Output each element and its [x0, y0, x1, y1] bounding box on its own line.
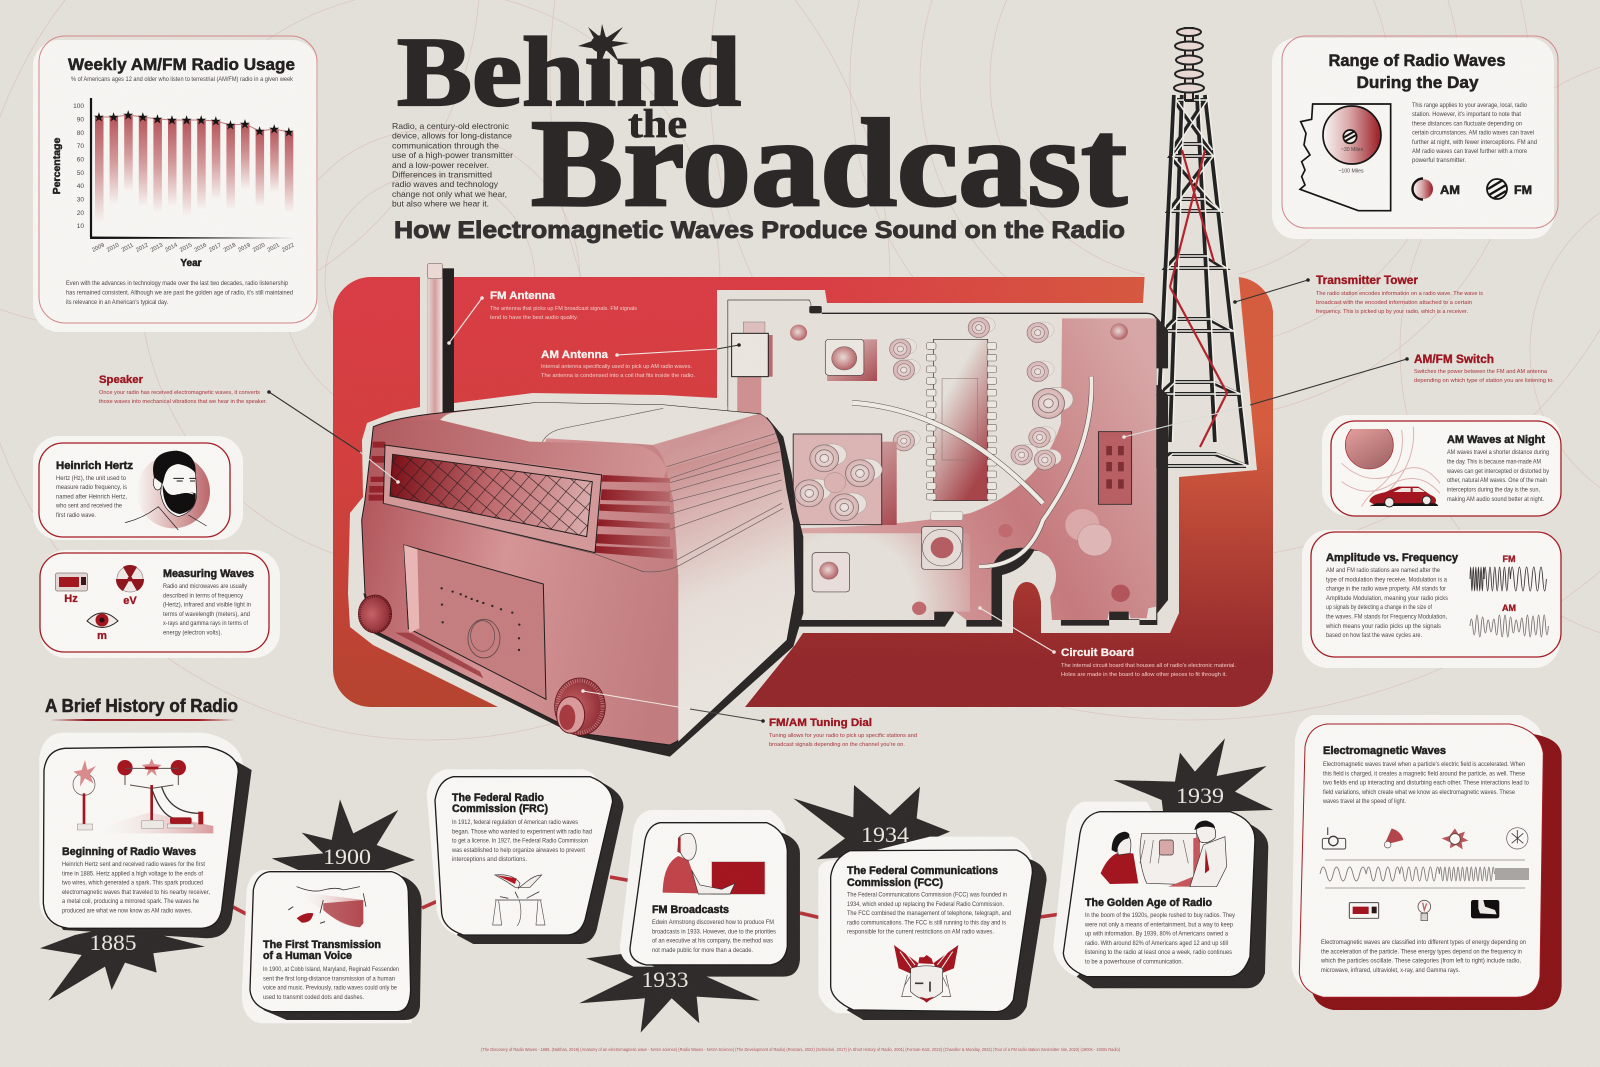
panel: electromagnetic waves: two fields end up interacting and disturbing each other. These interactions lead to	[1323, 781, 1530, 787]
bar chart	[51, 98, 295, 269]
timeline card: 1933: of an executive at his company, the method was	[652, 939, 773, 945]
tuning dial label	[581, 689, 917, 748]
timeline card: 1900: In 1900, at Cobb Island, Maryland, Reginald Fessenden	[263, 967, 399, 973]
title	[397, 18, 1127, 233]
timeline card: 1885: Heinrich Hertz sent and received radio waves for the first	[62, 862, 205, 868]
timeline card: 1934: 1934	[861, 822, 909, 847]
square components	[793, 339, 1132, 592]
panel: range of radio waves	[1272, 36, 1558, 239]
AM antenna label: The antenna is condensed into a coil that fits inside the radio.	[541, 373, 695, 379]
panel: measuring waves: terms of wavelength (meters), and	[163, 612, 250, 618]
panel: measuring waves: energy (electron volts).	[163, 630, 222, 636]
legend: AM and FM: AM	[1440, 183, 1460, 197]
bar chart: Percentage	[51, 138, 63, 194]
timeline card: 1900: voice and music. Previously, radio waves could only be	[263, 986, 398, 992]
title: Behind	[397, 18, 741, 127]
right stripes and grooves	[595, 433, 783, 572]
range paragraph: station. However, it's important to note that	[1412, 112, 1521, 118]
bar chart: 10	[77, 223, 84, 230]
capacitors	[790, 317, 1130, 615]
intro paragraph: Differences in transmitted	[392, 170, 492, 180]
bar chart: 2011	[121, 243, 135, 254]
panel: electromagnetic waves: Electromagnetic waves travel when a particle's electric field is accelerated. When	[1323, 762, 1525, 768]
icon row: microwave, bulb, x-ray foot	[1349, 900, 1499, 921]
bar chart: 2020	[252, 242, 266, 254]
timeline card: 1934: radio communications. The FCC is still running to this day and is	[847, 920, 1006, 926]
range paragraph: AM radio waves can travel further with a more	[1412, 149, 1528, 155]
panel: AM waves at night: waves can get intercepted or distorted by	[1446, 469, 1549, 475]
timeline card: FRC: was established to help organize airwaves to prevent	[451, 848, 585, 854]
heading: Weekly AM/FM Radio Usage	[68, 55, 295, 74]
timeline card: 1939: up with information. By 1939, 80% of Americans owned a	[1085, 932, 1229, 938]
timeline card: 1939: listening to the radio at least once a week, radio continues	[1085, 950, 1232, 956]
intro paragraph: Radio, a century-old electronic	[392, 121, 509, 131]
bar chart: 2021	[267, 242, 281, 254]
bar chart: 2022	[281, 242, 295, 254]
bar chart: ★	[210, 114, 222, 128]
timeline card: 1885: electromagnetic waves that traveled to his nearby receiver,	[62, 890, 210, 896]
legend: AM and FM	[1413, 178, 1532, 200]
AM antenna label	[541, 343, 741, 379]
timeline card: FRC: The Federal Radio	[452, 792, 544, 804]
timeline card: 1939: In the boom of the 1920s, people rushed to buy radios. They	[1085, 913, 1235, 919]
timeline card: 1885: two wires, which generated a spark. This spark produced	[62, 881, 203, 887]
panel: amplitude vs frequency: Amplitude vs. Frequency	[1326, 552, 1459, 564]
AM antenna box	[728, 300, 810, 415]
timeline card: FRC: to get a license. In 1927, the Federal Radio Commission	[452, 839, 588, 845]
circuit board label: Holes are made in the board to allow other pieces to fit through it.	[1061, 672, 1227, 678]
panel: AM waves at night: AM Waves at Night	[1447, 434, 1545, 446]
circuit board	[728, 300, 1168, 627]
white wires	[852, 403, 1043, 503]
illustration: Edwin Armstrong and FM panel	[663, 833, 765, 894]
speaker label: Speaker	[99, 374, 144, 386]
circuit board label	[978, 606, 1236, 678]
sources footer: (The Discovery of Radio Waves - 1888, (Nahhas, 2019) (Anatomy of an electromagnetic wave - NASA science) (Radio Waves - NASA Science) (The Development of Radio) (Ronzani, 2022) (Schnickel, 2017) (A Short History of Radio, 2001) (Forman-Katz, 2022) (Chandler & Munday, 2022) (Tour of a FM radio station transmitter site, 2022) (1900s - 1930s Radio)	[481, 1047, 1120, 1052]
panel: electromagnetic waves: waves travel at the speed of light.	[1322, 799, 1406, 805]
range paragraph: further at night, with fewer interceptions. FM and	[1412, 140, 1537, 146]
timeline card: 1939: were not only a means of entertainment, but a way to keep	[1084, 922, 1234, 928]
speaker label	[99, 374, 400, 484]
bar chart: 40	[77, 183, 84, 190]
legend: AM and FM: FM	[1514, 183, 1532, 197]
portrait of Hertz	[125, 451, 210, 530]
timeline card: 1934: The Federal Communications Commission (FCC) was founded in	[847, 892, 1007, 898]
AM/FM switch label: Switches the power between the FM and AM antenna	[1414, 369, 1548, 375]
bar chart: 80	[77, 130, 84, 137]
bar chart: Year	[180, 258, 202, 269]
transmitter tower label: Transmitter Tower	[1316, 275, 1419, 287]
icon: star over the i	[578, 24, 629, 72]
tuning dial knob	[555, 678, 605, 735]
background radio wave arcs	[0, 0, 1600, 740]
FM wave	[1470, 554, 1546, 591]
timeline card: FRC: interceptions and distortions.	[452, 857, 527, 863]
panel: measuring waves: Radio and microwaves are usually	[163, 584, 247, 590]
panel: Heinrich Hertz: Hertz (Hz), the unit used to	[56, 476, 127, 482]
timeline card: FRC: began. Those who wanted to experiment with radio had	[452, 829, 592, 835]
FM antenna label: tend to have the best audio quality.	[490, 315, 578, 321]
radio outer shadow	[363, 417, 803, 757]
panel: amplitude vs frequency: AM and FM radio stations are named after the	[1326, 568, 1441, 574]
timeline card: 1885: Beginning of Radio Waves	[62, 846, 196, 858]
heading	[1328, 51, 1506, 92]
map: Arizona	[1300, 104, 1391, 211]
transmitter tower label: frequency. This is picked up by your radio, which is a receiver.	[1316, 309, 1468, 315]
panel: amplitude vs frequency: Amplitude Modulation, meaning your radio picks	[1326, 596, 1448, 602]
chart subtitle: % of Americans ages 12 and older who listen to terrestrial (AM/FM) radio in a given week	[71, 77, 294, 83]
panel: amplitude vs frequency: the waves. FM stands for Frequency Modulation,	[1326, 614, 1447, 620]
timeline card: 1933: broadcasts in 1933. However, due to the priorities	[652, 929, 776, 935]
timeline card: 1939: 1939	[1176, 783, 1224, 808]
panel: amplitude vs frequency: change in the radio wave property. AM stands for	[1326, 587, 1446, 593]
AM wave	[1470, 603, 1548, 637]
icon: microwave: Hz	[64, 593, 78, 605]
bar chart: 2012	[135, 242, 149, 254]
panel: Heinrich Hertz: who sent and received the	[55, 504, 123, 510]
panel: measuring waves: (Hertz), infrared and visible light in	[163, 603, 251, 609]
heading: Range of Radio Waves	[1328, 51, 1506, 70]
timeline card: 1900: used to transmit coded dots and dashes.	[263, 995, 364, 1001]
timeline card: FRC: In 1912, federal regulation of American radio waves	[452, 820, 578, 826]
transmitter tower	[1156, 28, 1250, 466]
chart note: its relevance in an American's typical day.	[66, 300, 168, 306]
bar chart: 20	[77, 210, 84, 217]
icon: radiation: eV	[123, 595, 137, 607]
panel: Heinrich Hertz: first radio wave.	[56, 513, 96, 519]
bar chart: ★	[268, 122, 280, 136]
timeline card: 1934: 1934, which ended up replacing the Federal Radio Commission.	[847, 902, 1004, 908]
AM antenna label: Internal antenna specifically used to pick up AM radio waves.	[541, 364, 692, 370]
panel: AM waves at night	[1322, 415, 1562, 516]
illustration: eagle over towers	[493, 875, 545, 926]
timeline card: 1939	[1053, 738, 1273, 988]
bar chart: ★	[166, 112, 178, 128]
radio body	[362, 403, 795, 745]
intro paragraph: change not only what we hear,	[392, 189, 507, 199]
AM/FM switch label	[1122, 354, 1554, 439]
board black edge	[797, 317, 1168, 627]
bar chart: 2009	[91, 242, 106, 254]
bar chart: 2016	[194, 242, 208, 254]
main red panel	[333, 277, 1273, 707]
timeline card: 1939: to be a powerhouse of communication.	[1085, 960, 1183, 966]
intro paragraph: use of a high-power transmitter	[392, 150, 513, 160]
panel: electromagnetic waves	[1292, 715, 1562, 1010]
panel: electromagnetic waves: Electromagnetic waves are classified into different types of energy depending on	[1321, 940, 1526, 946]
panel: amplitude vs frequency: up signals by detecting a change in the size of	[1326, 605, 1432, 611]
panel: AM waves at night: AM waves travel a shorter distance during	[1447, 450, 1549, 456]
illustration: FCC crest	[894, 945, 958, 1003]
icon: eye	[87, 613, 118, 642]
bar chart: ★	[122, 108, 134, 122]
tuning dial label: broadcast signals depending on the channel you're on.	[769, 742, 905, 748]
range paragraph: This range applies to your average, local, radio	[1412, 103, 1528, 109]
panel: AM waves at night: other, natural AM waves. One of the main	[1447, 478, 1547, 484]
timeline card: 1885: 1885	[90, 930, 136, 955]
bar chart: ★	[195, 112, 207, 128]
bar chart: ★	[108, 110, 119, 124]
timeline card: 1934: responsible for the current restrictions on AM radio waves.	[847, 930, 994, 936]
bar chart: 30	[77, 196, 84, 204]
panel: Heinrich Hertz: named after Heinrich Hertz,	[56, 494, 127, 500]
left stripes	[369, 442, 385, 501]
panel: electromagnetic waves: Electromagnetic Waves	[1323, 745, 1446, 757]
bar chart: 100	[73, 103, 84, 110]
timeline card: 1933: 1933	[642, 967, 688, 992]
bar chart: ★	[93, 110, 105, 124]
FM antenna	[428, 263, 454, 420]
AM antenna label: AM Antenna	[541, 349, 609, 361]
panel: range of radio waves: ~100 Miles	[1338, 168, 1364, 174]
intro paragraph: and a low-power receiver.	[392, 160, 489, 170]
timeline card: 1934: Commission (FCC)	[847, 877, 943, 889]
panel: AM waves at night: the day. This is because man-made AM	[1447, 459, 1541, 465]
timeline card: 1900: The First Transmission	[263, 939, 381, 951]
illustration: voice transmission	[288, 887, 366, 927]
cream cut-out around radio, board and tower	[348, 250, 1257, 707]
tuning dial label: FM/AM Tuning Dial	[769, 717, 872, 729]
pink board shading	[797, 318, 1156, 620]
timeline card: 1885: a metal coil, producing a mirrored spark. The waves he	[62, 899, 200, 905]
panel: amplitude vs frequency: based on how fast the wave cycles are.	[1326, 633, 1422, 639]
range paragraph: powerful transmitter.	[1412, 158, 1466, 164]
panel: measuring waves: described in terms of frequency	[163, 593, 243, 599]
heading: During the Day	[1356, 73, 1479, 92]
timeline card: 1900	[242, 799, 422, 1023]
timeline card: 1934: The FCC combined the management of telephone, telegraph, and	[847, 911, 1011, 917]
intro paragraph	[392, 121, 513, 209]
panel: amplitude vs frequency: type of modulation they receive. Modulation is a	[1326, 577, 1448, 583]
timeline card: 1900: of a Human Voice	[263, 950, 352, 962]
panel: amplitude vs frequency	[1302, 530, 1561, 668]
illustration: Hertz spark experiment	[73, 758, 213, 833]
timeline card: 1933: not made public for more than a decade.	[652, 948, 753, 954]
left knob	[358, 595, 392, 633]
title: Broadcast	[531, 95, 1127, 233]
subtitle: How Electromagnetic Waves Produce Sound on the Radio	[394, 217, 1125, 244]
icon: radiation	[116, 565, 144, 607]
timeline card: FRC	[427, 769, 623, 944]
section heading: history: A Brief History of Radio	[45, 696, 238, 716]
bar chart: 2014	[164, 242, 179, 254]
transmitter tower label	[1233, 275, 1483, 315]
bar chart: 2017	[208, 242, 222, 254]
panel: measuring waves: Measuring Waves	[163, 568, 254, 580]
speaker label: Once your radio has received electromagnetic waves, it converts	[99, 390, 260, 396]
panel: electromagnetic waves: microwave, infrared, ultraviolet, x-ray, and Gamma rays.	[1321, 968, 1460, 974]
panel: electromagnetic waves: this field is charged, it creates a magnetic field around the particle, as well. These	[1323, 771, 1526, 777]
timeline card: FRC: Commission (FRC)	[452, 803, 548, 815]
chip	[926, 339, 997, 501]
panel: AM waves at night: interceptors during the day is the sun,	[1447, 488, 1540, 494]
timeline card: 1900: sent the first long-distance transmission of a human	[263, 976, 395, 982]
panel: measuring waves: x-rays and gamma rays in terms of	[163, 621, 248, 627]
intro paragraph: device, allows for long-distance	[392, 131, 512, 141]
panel: electromagnetic waves: field variations, which create what we know as electromagnetic waves. These	[1323, 790, 1516, 796]
icon: microwave	[56, 573, 88, 605]
panel: Heinrich Hertz: Heinrich Hertz	[56, 460, 134, 472]
AM wave: AM	[1502, 603, 1516, 613]
intro paragraph: communication through the	[392, 140, 499, 150]
timeline card: 1934	[793, 785, 1047, 1020]
timeline card: 1885: produced are what we now know as AM radio waves.	[62, 908, 192, 914]
bar chart: ★	[137, 110, 149, 124]
bar chart: ★	[239, 116, 251, 132]
tuning dial label: Tuning allows for your radio to pick up specific stations and	[769, 733, 917, 739]
speaker label: those waves into mechanical vibrations that we hear in the speaker.	[99, 399, 267, 405]
chart note	[66, 281, 293, 306]
panel: Heinrich Hertz	[33, 436, 243, 540]
transmitter tower label: broadcast with the encoded information attached to a certain	[1316, 300, 1472, 306]
radio top	[440, 403, 758, 457]
panel: Heinrich Hertz: measure radio frequency, is	[56, 485, 127, 491]
radio lid band	[373, 420, 667, 478]
bar chart: ★	[225, 118, 236, 132]
bar chart: 2013	[150, 242, 164, 254]
illustration: sun, waves and car	[1342, 421, 1440, 507]
circuit board label: Circuit Board	[1061, 647, 1134, 659]
panel: AM waves at night: making AM audio sound better at night.	[1447, 497, 1544, 503]
range paragraph: these distances can fluctuate depending on	[1412, 121, 1522, 127]
timeline connectors	[233, 877, 1068, 920]
intro paragraph: but also where we hear it.	[392, 199, 489, 209]
bar chart: ★	[152, 112, 163, 126]
illustration: family at radio	[1101, 821, 1227, 887]
bar chart: 50	[77, 170, 84, 177]
timeline card: 1900: 1900	[323, 844, 371, 869]
bar chart: 2015	[179, 242, 193, 254]
timeline card: 1939: radio. With around 82% of Americans aged 12 and up still	[1085, 941, 1228, 947]
icon: eye: m	[97, 630, 107, 642]
bar chart: 2010	[106, 242, 120, 254]
AM/FM switch label: AM/FM Switch	[1414, 354, 1494, 366]
timeline card: 1934: The Federal Communications	[847, 865, 998, 877]
timeline card: 1885	[39, 733, 252, 1001]
timeline card: 1939: The Golden Age of Radio	[1085, 897, 1212, 909]
bar chart: ★	[181, 112, 192, 128]
grille	[383, 445, 602, 553]
icon row: radio, lamp, sun, x-ray symbol	[1322, 827, 1528, 849]
panel: weekly radio usage	[33, 36, 318, 332]
bar chart: 70	[77, 143, 84, 150]
timeline card: 1933: Edwin Armstrong discovered how to produce FM	[652, 920, 774, 926]
radio side	[663, 414, 795, 742]
radio	[358, 263, 810, 757]
bar chart: 90	[77, 116, 84, 124]
bar chart: ★	[254, 124, 265, 138]
timeline card: 1885: time in 1885. Hertz applied a high voltage to the ends of	[62, 871, 203, 877]
bar chart: ★	[283, 124, 295, 140]
panel: amplitude vs frequency: which means your radio picks up the signals	[1325, 624, 1441, 630]
bar chart: 2018	[223, 242, 237, 254]
spectrum wave	[1320, 860, 1529, 888]
AM/FM switch label: depending on which type of station you are listening to.	[1414, 378, 1554, 384]
circuit board label: The internal circuit board that houses all of radio's electronic material.	[1061, 663, 1236, 669]
chart note: has remained consistent. Although we are past the golden age of radio, it's still maintained	[66, 290, 293, 296]
FM wave: FM	[1502, 554, 1516, 564]
bar chart: 2019	[237, 242, 252, 254]
range paragraph: certain circumstances. AM radio waves can travel	[1412, 131, 1534, 137]
timeline card: 1933	[579, 810, 800, 1033]
panel: electromagnetic waves: which the particles oscillate. These categories (from left to right) include radio,	[1320, 959, 1521, 965]
FM antenna label	[447, 290, 637, 345]
FM antenna label: FM Antenna	[490, 290, 556, 302]
transmitter tower label: The radio station encodes information on a radio wave. The wave is	[1316, 291, 1483, 297]
bar chart: 60	[77, 156, 84, 164]
panel: range of radio waves: ~30 Miles	[1341, 147, 1364, 153]
intro paragraph: radio waves and technology	[392, 179, 499, 189]
dial window	[404, 545, 546, 699]
panel: electromagnetic waves: the acceleration of the particle. These energy types depend on the frequency in	[1321, 949, 1522, 955]
chart note: Even with the advances in technology made over the last two decades, radio listenership	[66, 281, 289, 287]
panel: measuring waves	[40, 550, 280, 658]
timeline card: 1933: FM Broadcasts	[652, 904, 729, 916]
FM antenna label: The antenna that picks up FM broadcast signals. FM signals	[490, 306, 637, 312]
title: the	[628, 101, 687, 146]
range paragraph	[1412, 103, 1537, 164]
